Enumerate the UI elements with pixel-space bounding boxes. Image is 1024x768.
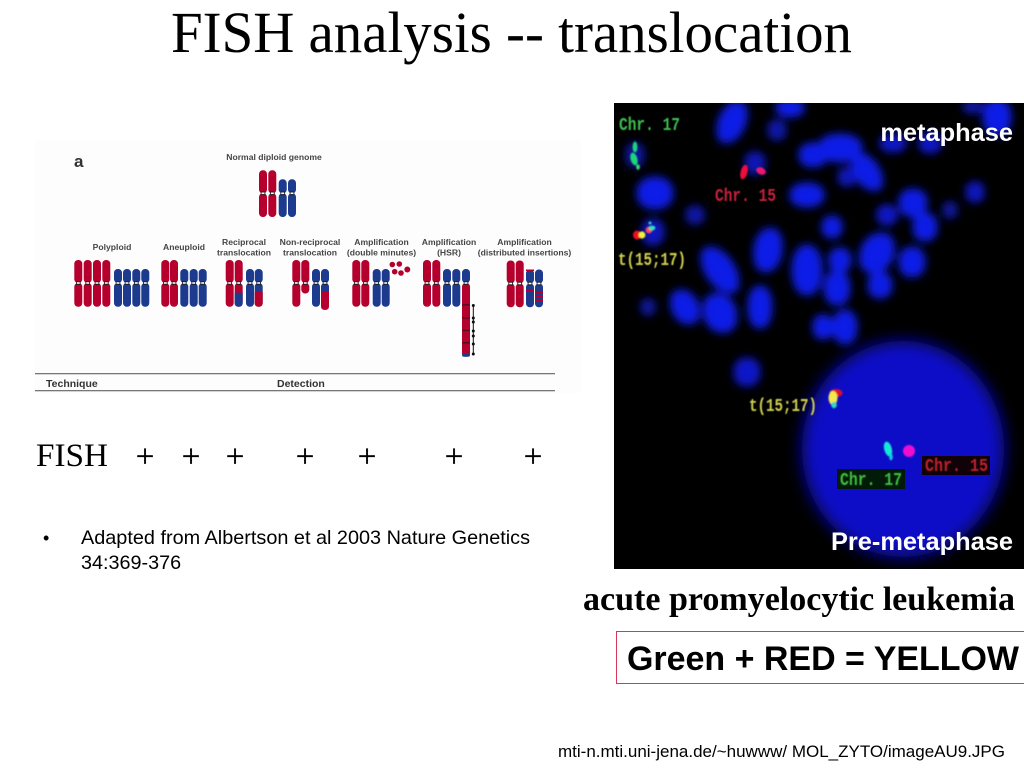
- label: aneuploid: Aneuploid: [163, 242, 205, 252]
- FISH row: +: [136, 439, 154, 475]
- pre-metaphase nucleus: [802, 341, 1004, 557]
- citation bullet: [43, 527, 530, 574]
- chromosomes: amplification double minutes: [352, 260, 410, 307]
- citation bullet: 34:369-376: [81, 552, 181, 574]
- FISH signals: metaphase t(15;17): [633, 222, 655, 240]
- FISH row: +: [358, 439, 376, 475]
- caption: acute promyelocytic leukemia: acute promyelocytic leukemia: [583, 581, 1015, 618]
- callout: Green + RED = YELLOW: Green + RED = YELLOW: [627, 640, 1019, 678]
- bracket: HSR repeat ruler: [472, 304, 475, 356]
- panel: chromosome diagram: [35, 140, 581, 393]
- FISH row: +: [445, 439, 463, 475]
- FISH signals: pre-metaphase Chr. 17 and Chr. 15: [882, 441, 915, 460]
- label: t(15;17) pre-metaphase: t(15;17): [749, 397, 817, 417]
- table header: technique and detection: Technique: [46, 378, 98, 390]
- FISH row: FISH: [36, 437, 108, 474]
- table header: technique and detection: Detection: [277, 378, 325, 390]
- label: Chr. 15 pre-metaphase: Chr. 15: [925, 457, 988, 477]
- label: pre-metaphase: Pre-metaphase: [831, 528, 1013, 556]
- FISH row: +: [226, 439, 244, 475]
- source url: mti-n.mti.uni-jena.de/~huwww/ MOL_ZYTO/imageAU9.JPG: [558, 742, 1005, 761]
- label: amplification HSR: Amplification: [422, 237, 476, 247]
- label: metaphase: metaphase: [880, 119, 1013, 147]
- label: amplification distributed insertions: Amplification: [497, 237, 552, 247]
- FISH signals: pre-metaphase t(15;17): [828, 389, 842, 408]
- chromosomes: non-reciprocal translocation: [292, 260, 329, 310]
- chromosomes: reciprocal translocation: [226, 260, 263, 307]
- chromosomes: aneuploid: [161, 260, 207, 307]
- label: non-reciprocal translocation: Non-reciprocal: [280, 237, 340, 247]
- citation bullet: Adapted from Albertson et al 2003 Nature Genetics: [81, 527, 530, 549]
- label: amplification HSR: (HSR): [437, 248, 461, 258]
- label: polyploid: Polyploid: [93, 242, 131, 252]
- chromosomes: normal diploid genome: [259, 170, 296, 217]
- metaphase chromosomes: [627, 98, 1010, 385]
- FISH signals: red Chr. 15: [739, 164, 767, 180]
- panel: FISH micrograph: [614, 98, 1024, 569]
- citation bullet: •: [43, 528, 49, 548]
- chromosomes: polyploid: [74, 260, 149, 307]
- label: Chr. 17 pre-metaphase: Chr. 17: [840, 471, 902, 491]
- title: FISH analysis -- translocation: [171, 0, 852, 65]
- chromosomes: amplification HSR: [423, 260, 470, 357]
- label: amplification double minutes: Amplification: [354, 237, 409, 247]
- label: t(15;17) metaphase: t(15;17): [618, 251, 686, 271]
- label: amplification double minutes: (double minutes): [347, 248, 416, 258]
- FISH row: +: [182, 439, 200, 475]
- label: Chr. 17 metaphase: Chr. 17: [619, 116, 680, 136]
- label: non-reciprocal translocation: translocation: [283, 248, 337, 258]
- label: normal diploid genome: Normal diploid genome: [226, 152, 322, 162]
- label: reciprocal translocation: Reciprocal: [222, 237, 266, 247]
- label: reciprocal translocation: translocation: [217, 248, 271, 258]
- table header: technique and detection: [35, 373, 555, 391]
- label: Chr. 15 metaphase: Chr. 15: [715, 187, 776, 207]
- FISH row: +: [296, 439, 314, 475]
- chromosomes: amplification distributed insertions: [507, 260, 543, 307]
- FISH row: [36, 437, 542, 475]
- label: amplification distributed insertions: (distributed insertions): [478, 248, 571, 258]
- FISH row: +: [524, 439, 542, 475]
- FISH signals: green Chr. 17: [629, 142, 640, 170]
- panel label a: a: [74, 152, 84, 171]
